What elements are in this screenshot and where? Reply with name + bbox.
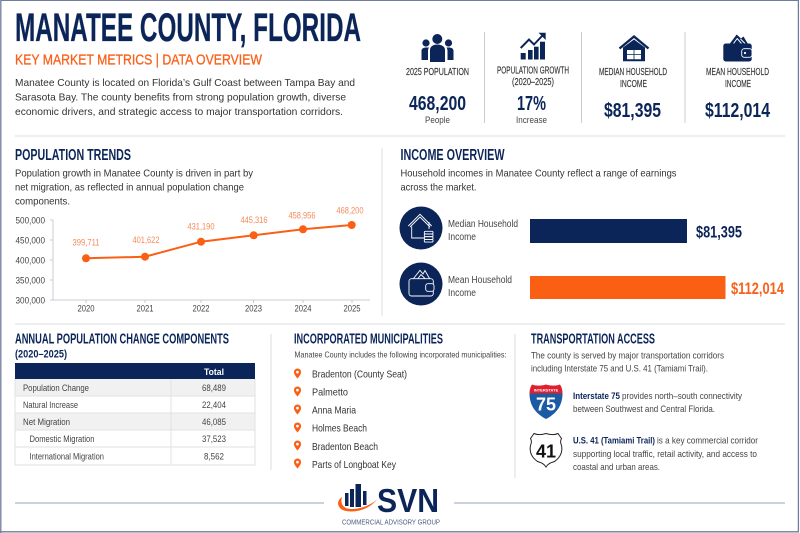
header xyxy=(15,6,361,118)
us 41 text: is a key commercial corridor xyxy=(657,436,758,446)
KPI: median household income: MEDIAN HOUSEHOLD xyxy=(599,66,667,78)
description xyxy=(15,168,254,208)
logo: SVN: SVN xyxy=(377,482,439,519)
heading: INCOME OVERVIEW xyxy=(400,147,505,164)
line chart: 399,711 xyxy=(72,238,100,248)
KPI: 2025 population xyxy=(406,34,469,126)
mean bar xyxy=(530,276,726,299)
panel: incorporated municipalities xyxy=(294,332,506,471)
line chart: 2024 xyxy=(294,304,312,314)
heading xyxy=(15,332,229,360)
description: net migration, as reflected in annual population change xyxy=(15,182,244,194)
icon: house xyxy=(620,36,648,61)
icon: growth chart xyxy=(521,33,546,60)
table: 46,085 xyxy=(202,417,226,427)
line chart: 2025 xyxy=(344,304,360,314)
heading: INCORPORATED MUNICIPALITIES xyxy=(294,332,443,348)
interstate 75 text: provides north–south connectivity xyxy=(622,391,742,402)
description: Population growth in Manatee County is driven in part by xyxy=(15,168,254,180)
KPI: population growth: 17% xyxy=(517,93,546,115)
icon: us 41 shield xyxy=(530,434,562,467)
table: 8,562 xyxy=(204,452,224,462)
heading: POPULATION TRENDS xyxy=(15,147,131,164)
municipality list: Parts of Longboat Key xyxy=(312,459,397,471)
subtitle: KEY MARKET METRICS | DATA OVERVIEW xyxy=(15,52,262,68)
line chart: 2023 xyxy=(245,304,262,314)
us 41 text: coastal and urban areas. xyxy=(573,462,660,473)
description: Manatee County includes the following incorporated municipalities: xyxy=(294,350,506,360)
icon: people xyxy=(422,34,454,62)
mean label: Mean Household xyxy=(448,275,512,286)
KPI: mean household income: $112,014 xyxy=(705,100,771,122)
icon: house with coins xyxy=(400,206,442,250)
icon: wallet outline xyxy=(400,262,442,306)
us 41 text: supporting local traffic, retail activity, and access to xyxy=(573,449,757,460)
line chart: 2022 xyxy=(192,304,210,314)
logo: SVN xyxy=(338,482,440,526)
line chart xyxy=(16,206,370,314)
description: components. xyxy=(15,196,70,208)
median label xyxy=(448,219,518,243)
icon: interstate 75 shield: INTERSTATE xyxy=(534,387,559,392)
interstate 75 text: between Southwest and Central Florida. xyxy=(573,404,715,415)
table: 68,489 xyxy=(202,383,226,393)
intro text: Manatee County is located on Florida’s Gulf Coast between Tampa Bay and xyxy=(15,77,355,89)
KPI: population growth: POPULATION GROWTH xyxy=(497,64,569,76)
median label: Median Household xyxy=(448,219,518,230)
table: Population Change xyxy=(23,383,89,393)
intro text xyxy=(15,77,355,118)
municipality list: Palmetto xyxy=(312,386,348,398)
icons: map pins xyxy=(294,368,301,468)
icon: interstate 75 shield: 75 xyxy=(536,394,556,414)
table: International Migration xyxy=(30,452,104,462)
KPI: mean household income xyxy=(705,34,771,122)
line chart: 450,000 xyxy=(16,236,45,246)
municipality list: Bradenton Beach xyxy=(312,441,378,453)
KPI: 2025 population: People xyxy=(425,115,450,126)
median bar xyxy=(530,219,687,243)
description: Household incomes in Manatee County reflect a range of earnings xyxy=(400,168,676,180)
KPI: median household income xyxy=(599,36,667,122)
line chart: 350,000 xyxy=(16,276,45,286)
heading: (2020–2025) xyxy=(15,348,67,360)
municipality list: Bradenton (County Seat) xyxy=(312,368,407,380)
panel: transportation access xyxy=(530,332,758,473)
description xyxy=(531,350,724,374)
KPI: mean household income: INCOME xyxy=(725,78,751,90)
panel: annual population change components xyxy=(15,332,255,465)
icon: wallet xyxy=(723,34,752,62)
description: including Interstate 75 and U.S. 41 (Tamiami Trail). xyxy=(531,364,708,374)
title: MANATEE COUNTY, FLORIDA xyxy=(15,6,361,50)
mean label: Income xyxy=(448,288,476,299)
line chart: 401,622 xyxy=(132,235,160,245)
line chart: 468,200 xyxy=(336,206,364,216)
panel: income overview xyxy=(400,147,784,306)
mean label xyxy=(448,275,512,299)
KPI: population growth xyxy=(497,33,569,126)
line chart: 500,000 xyxy=(16,216,45,226)
heading: ANNUAL POPULATION CHANGE COMPONENTS xyxy=(15,332,229,348)
municipality list: Anna Maria xyxy=(312,404,356,416)
description: The county is served by major transportation corridors xyxy=(531,350,724,362)
table xyxy=(15,363,255,465)
KPI: 2025 population: 2025 POPULATION xyxy=(406,66,469,78)
line chart: 431,190 xyxy=(188,222,214,232)
table: Natural Increase xyxy=(23,400,78,410)
line chart: 458,956 xyxy=(288,210,316,220)
table: Net Migration xyxy=(23,417,70,427)
line chart: 300,000 xyxy=(16,296,45,306)
intro text: economic drivers, and strategic access to major transportation corridors. xyxy=(15,106,343,118)
table: Domestic Migration xyxy=(30,434,94,444)
intro text: Sarasota Bay. The county benefits from strong population growth, diverse xyxy=(15,92,346,104)
icon: us 41 shield: 41 xyxy=(536,442,556,462)
heading: TRANSPORTATION ACCESS xyxy=(531,332,655,348)
KPI: 2025 population: 468,200 xyxy=(409,93,466,115)
table: Total xyxy=(204,367,224,378)
interstate 75 text xyxy=(573,391,742,415)
table: 22,404 xyxy=(202,400,226,410)
line chart: 2020 xyxy=(78,304,94,314)
median label: Income xyxy=(448,232,476,243)
description: across the market. xyxy=(400,182,476,194)
municipality list: Holmes Beach xyxy=(312,422,367,434)
interstate 75 text: Interstate 75 xyxy=(573,391,621,402)
description xyxy=(400,168,676,194)
mean value: $112,014 xyxy=(731,279,784,298)
median value: $81,395 xyxy=(696,222,742,242)
us 41 text xyxy=(573,436,758,473)
KPI: median household income: INCOME xyxy=(620,78,647,90)
KPI: population growth: (2020–2025) xyxy=(512,76,554,88)
panel: population trends xyxy=(15,147,370,314)
us 41 text: U.S. 41 (Tamiami Trail) xyxy=(573,436,655,446)
municipality list xyxy=(294,368,407,471)
line chart: 400,000 xyxy=(16,256,45,266)
table: 37,523 xyxy=(202,434,226,444)
KPI: median household income: $81,395 xyxy=(604,100,661,122)
line chart: 2021 xyxy=(136,304,154,314)
line chart: 445,316 xyxy=(240,215,268,225)
icon: interstate 75 shield xyxy=(530,384,562,419)
logo: SVN: COMMERCIAL ADVISORY GROUP xyxy=(342,518,440,526)
KPI: population growth: Increase xyxy=(516,115,547,126)
